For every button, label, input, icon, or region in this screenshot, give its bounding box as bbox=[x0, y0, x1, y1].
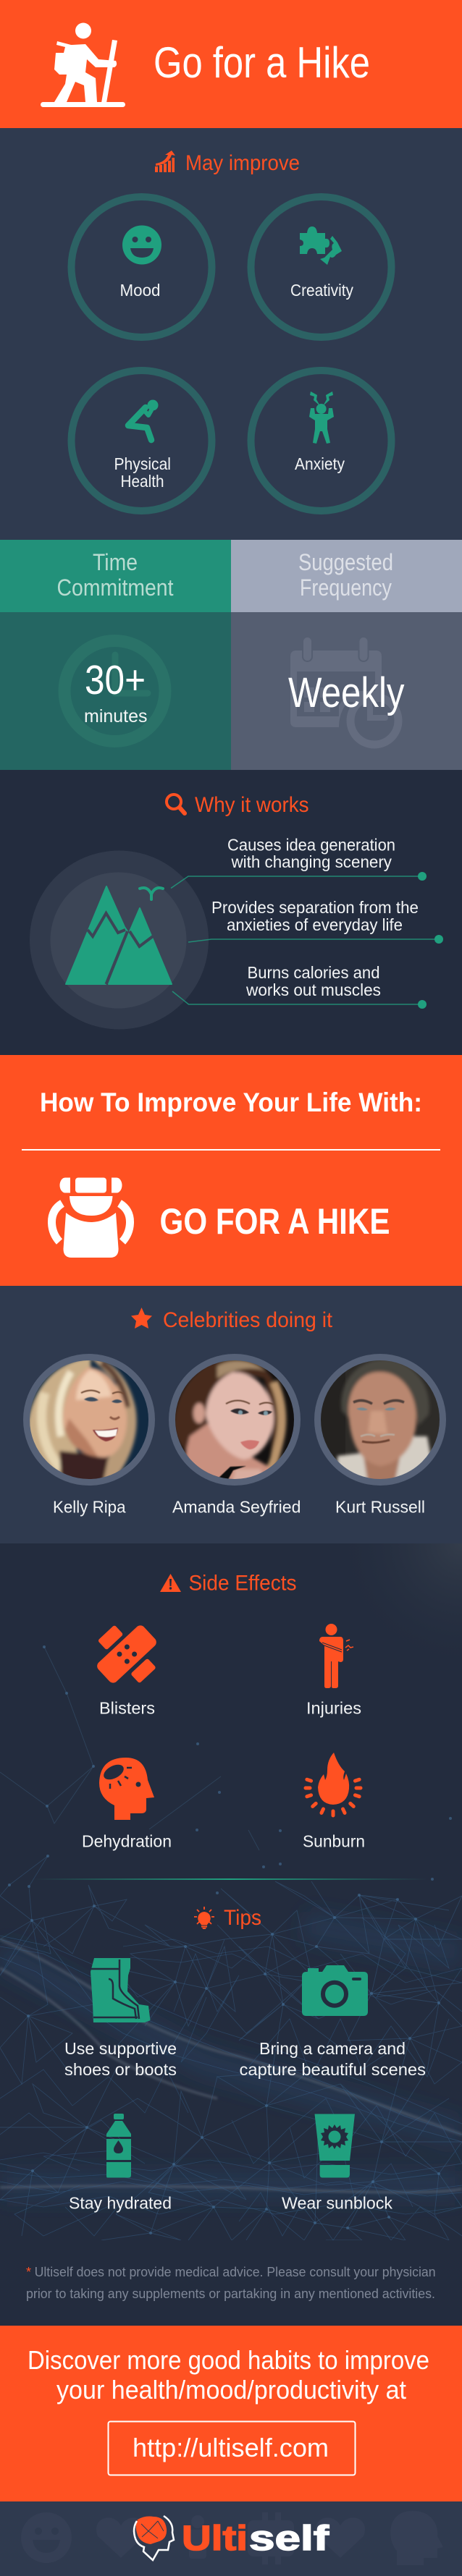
icon: boots bbox=[91, 1958, 151, 2022]
tip: stay hydrated bbox=[69, 2114, 172, 2213]
value: 30+ minutes: minutes bbox=[84, 706, 148, 726]
name: Amanda Seyfried bbox=[172, 1498, 301, 1517]
heading: how to improve: How To Improve Your Life With: bbox=[40, 1088, 422, 1117]
effect: dehydration bbox=[82, 1758, 172, 1851]
icon: hiker bbox=[41, 23, 125, 107]
panel: may improve bbox=[0, 128, 462, 540]
header banner bbox=[0, 0, 462, 128]
panel: why it works bbox=[0, 770, 462, 1055]
heading: tips: Tips bbox=[224, 1906, 261, 1930]
benefit: creativity bbox=[251, 197, 391, 337]
icon: mountains bbox=[66, 886, 172, 984]
callout: separation from anxieties bbox=[188, 898, 443, 944]
link button bbox=[109, 2421, 355, 2475]
tip: bring a camera: Bring a camera and bbox=[259, 2039, 406, 2058]
benefit: anxiety: Anxiety bbox=[295, 454, 345, 473]
callout: burns calories bbox=[172, 963, 427, 1009]
tip: bring a camera: capture beautiful scenes bbox=[239, 2060, 426, 2079]
icon: faint clock bbox=[64, 641, 165, 741]
tip: supportive boots bbox=[64, 1958, 177, 2079]
benefit: physical health: Health bbox=[120, 472, 164, 491]
link button: http://ultiself.com bbox=[133, 2433, 329, 2462]
icon: smiley bbox=[122, 226, 161, 265]
disclaimer: Ultiself does not provide medical advice. Please consult your physician bbox=[35, 2265, 436, 2279]
name: Kelly Ripa bbox=[53, 1498, 126, 1517]
call to action text: Discover more good habits to improve bbox=[28, 2345, 429, 2375]
disclaimer: * bbox=[26, 2265, 31, 2279]
tip: wear sunblock: Wear sunblock bbox=[282, 2194, 393, 2213]
heading: why it works: Why it works bbox=[195, 793, 308, 817]
value: 30+ minutes bbox=[84, 657, 148, 726]
icon: backpack bbox=[51, 1178, 130, 1258]
tip: bring a camera bbox=[239, 1965, 426, 2079]
benefit: anxiety bbox=[251, 370, 391, 511]
tip: wear sunblock bbox=[282, 2114, 393, 2213]
heading: suggested frequency: Frequency bbox=[300, 575, 392, 601]
panel: side effects bbox=[82, 1572, 365, 1851]
call to action text bbox=[28, 2345, 429, 2405]
panel: time commitment bbox=[0, 540, 231, 770]
callout: burns calories: works out muscles bbox=[245, 980, 381, 999]
benefit: mood: Mood bbox=[120, 281, 161, 300]
benefit: physical health: Physical bbox=[114, 454, 171, 473]
callout: burns calories: Burns calories and bbox=[248, 963, 379, 982]
icon: water bottle bbox=[106, 2114, 131, 2178]
heading: time commitment: Time bbox=[93, 549, 138, 575]
title: Go for a Hike bbox=[154, 38, 370, 87]
tip: stay hydrated: Stay hydrated bbox=[69, 2194, 172, 2213]
name: Kurt Russell bbox=[335, 1498, 425, 1517]
icon: injured person bbox=[319, 1624, 353, 1688]
effect: sunburn: Sunburn bbox=[303, 1832, 365, 1851]
icon: brain head bbox=[134, 2516, 174, 2560]
heading: celebrities: Celebrities doing it bbox=[163, 1308, 333, 1332]
heading: time commitment bbox=[56, 549, 174, 601]
background: network mesh panel bbox=[0, 1543, 462, 2326]
portrait: kurt russell bbox=[316, 1357, 447, 1517]
portrait: amanda seyfried bbox=[171, 1357, 301, 1517]
panel: how to improve banner bbox=[0, 1055, 462, 1286]
effect: dehydration: Dehydration bbox=[82, 1832, 172, 1851]
icon: bird bbox=[140, 888, 163, 899]
heading: may improve: May improve bbox=[185, 151, 300, 175]
icon: sunblock tube bbox=[314, 2114, 355, 2178]
heading: suggested frequency: Suggested bbox=[298, 549, 393, 575]
icon: flame and rays bbox=[306, 1753, 361, 1816]
icon: stressed figure bbox=[309, 391, 334, 444]
heading: suggested frequency bbox=[298, 549, 393, 601]
benefit: creativity: Creativity bbox=[290, 281, 353, 300]
tip: supportive boots: Use supportive bbox=[64, 2039, 177, 2058]
heading: go for a hike: GO FOR A HIKE bbox=[159, 1201, 390, 1242]
value: 30+ minutes: 30+ bbox=[85, 657, 146, 703]
logo: ultiself: self bbox=[249, 2520, 329, 2558]
effect: blisters: Blisters bbox=[99, 1699, 155, 1718]
benefit: physical health bbox=[71, 370, 211, 511]
disclaimer: prior to taking any supplements or partaking in any mentioned activities. bbox=[26, 2287, 435, 2301]
panel: celebrities doing it bbox=[23, 1308, 446, 1517]
illustration: mountains in circle bbox=[30, 851, 209, 1029]
callout: idea generation bbox=[171, 835, 427, 889]
heading: time commitment: Commitment bbox=[56, 575, 174, 601]
callout: idea generation: Causes idea generation bbox=[227, 835, 395, 854]
value: weekly: Weekly bbox=[288, 669, 404, 716]
callout: separation from anxieties: Provides separation from the bbox=[211, 898, 419, 917]
portrait: kelly ripa bbox=[25, 1357, 156, 1517]
icon: crouching figure bbox=[128, 399, 158, 440]
call to action text: your health/mood/productivity at bbox=[56, 2375, 406, 2405]
tip: supportive boots: shoes or boots bbox=[64, 2060, 177, 2079]
icon: head with sun bbox=[99, 1758, 154, 1820]
callout: idea generation: with changing scenery bbox=[231, 852, 392, 871]
logo: ultiself bbox=[134, 2516, 329, 2560]
icon: bandage bbox=[95, 1624, 159, 1685]
panel: footer bbox=[0, 2501, 462, 2576]
effect: injuries bbox=[306, 1624, 361, 1718]
callout: separation from anxieties: anxieties of everyday life bbox=[227, 915, 403, 934]
icon: faint calendar and clock bbox=[290, 637, 398, 745]
heading: tips bbox=[194, 1906, 261, 1930]
panel: suggested frequency bbox=[231, 540, 462, 770]
effect: sunburn bbox=[303, 1753, 365, 1851]
panel: tips bbox=[64, 1906, 426, 2213]
panel: call to action bbox=[0, 2326, 462, 2501]
logo: ultiself: Ulti bbox=[182, 2520, 248, 2558]
effect: blisters bbox=[95, 1624, 159, 1718]
benefit: mood bbox=[71, 197, 211, 337]
icon: puzzle pieces bbox=[300, 226, 342, 265]
disclaimer bbox=[26, 2265, 436, 2301]
effect: injuries: Injuries bbox=[306, 1699, 361, 1718]
faint background icons bbox=[21, 2511, 443, 2565]
heading: side effects: Side Effects bbox=[188, 1572, 297, 1596]
icon: camera bbox=[302, 1965, 368, 2016]
